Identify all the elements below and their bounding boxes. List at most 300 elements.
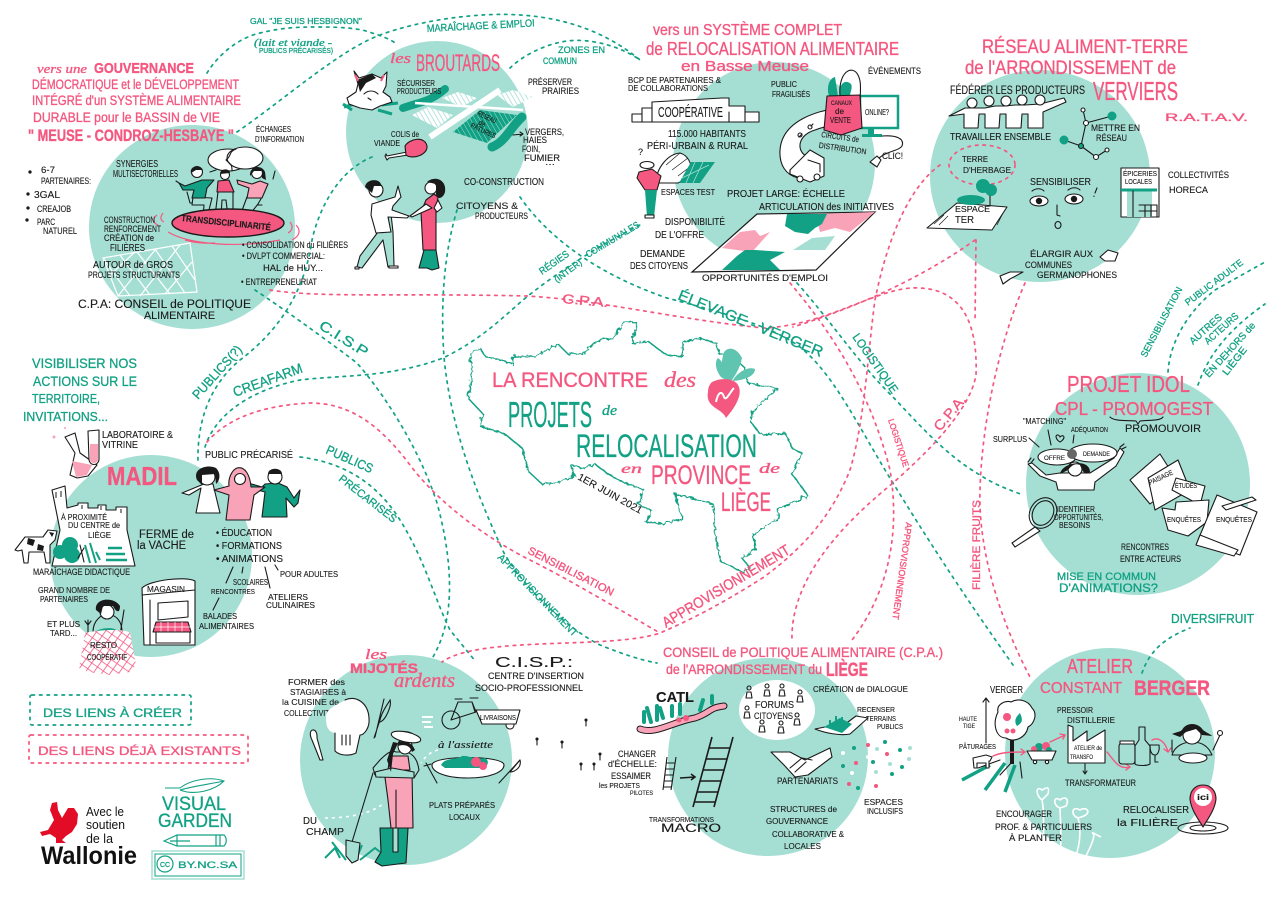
- link label: c.p.a. right: C.P.A.: [930, 391, 969, 434]
- text: construction renforcement: FILIÈRES: [110, 241, 145, 254]
- text: liste de partenaires: 3GAL: [34, 190, 60, 201]
- panel: réseau Aliment-Terre Verviers: [927, 37, 1248, 284]
- icon: cow in pasture: [973, 755, 992, 768]
- text: opportunités d'emploi: OPPORTUNITÉS D'EMPLOI: [702, 273, 828, 284]
- legend: dotted link types: [29, 695, 248, 763]
- text: éducation formations animations: • ÉDUCATION: [216, 526, 272, 539]
- text: espace ter: [955, 205, 990, 226]
- text: former des stagiaires: COLLECTIVITÉS: [284, 708, 339, 718]
- text: animations detail: CULINAIRES: [266, 601, 315, 610]
- text: documents labels: ENQUÊTES: [1216, 515, 1252, 524]
- text: changer d'échelle: d'ÉCHELLE:: [608, 759, 657, 770]
- text: citoyens et producteurs: [456, 201, 528, 221]
- text: du champ: DU: [303, 816, 317, 827]
- text: construction renforcement: [104, 215, 161, 254]
- link label: logistique green: LOGISTIQUE: [850, 331, 901, 396]
- icon: terre d'herbage dotted circle: [949, 145, 1015, 185]
- icon: three people seated on pink disc: [176, 166, 275, 218]
- connections: green dotted links to create: [198, 14, 1265, 673]
- text: autour de gros projets structurants: [88, 260, 180, 280]
- text: recenser terrains publics: [857, 705, 903, 731]
- text: resto coopératif: COOPÉRATIF: [87, 652, 127, 662]
- text: avec le soutien de la wallonie: [41, 805, 137, 870]
- text: magasin: MAGASIN: [147, 584, 185, 594]
- text: identifier opportunités: IDENTIFIER: [1057, 505, 1095, 514]
- text: catl: CATL: [656, 689, 694, 706]
- text: sécuriser producteurs: [397, 78, 441, 96]
- link label: autres acteurs en dehors de liège: EN DEHORS de: [1203, 320, 1258, 380]
- text: espaces inclusifs: ESPACES: [864, 797, 903, 807]
- circle: mijotés background: [300, 655, 512, 865]
- heading: projet idol: [1055, 371, 1213, 419]
- text: resto coopératif: [87, 640, 127, 662]
- icon: handshake: [771, 748, 832, 777]
- text: animations detail: [199, 570, 338, 631]
- icon: pencil: [164, 835, 226, 846]
- text: mettre en réseau: RÉSEAU: [1096, 133, 1127, 143]
- text: atelier de transfo: [1070, 745, 1102, 761]
- text: conseil de politique alimentaire: ALIMENTAIRE: [144, 310, 215, 322]
- text: liste de partenaires: PARC: [37, 217, 55, 227]
- heading: réseau aliment-terre: de l'ARRONDISSEMENT de: [965, 58, 1176, 79]
- text: pressoir distillerie: [1057, 705, 1115, 725]
- link label: autres acteurs en dehors de liège: [1188, 311, 1258, 380]
- text: grand nombre de partenaires: ET PLUS: [47, 620, 80, 629]
- circle: idol background: [1026, 373, 1250, 595]
- icon: licence box: [152, 851, 244, 879]
- text: cc by nc sa: [160, 860, 238, 871]
- text: ici: ici: [1197, 793, 1209, 802]
- link label: sensibilisation public adulte: PUBLIC ADULTE: [1183, 257, 1246, 308]
- icon: resto coopératif lady at table: [79, 600, 136, 675]
- text: 115 000 habitants: [647, 129, 748, 152]
- text: plats préparés locaux: LOCAUX: [449, 812, 480, 822]
- text: demande des citoyens: DES CITOYENS: [630, 260, 688, 272]
- text: visibiliser nos actions: TERRITOIRE,: [32, 391, 100, 406]
- icon: reaching hands: [1000, 250, 1118, 284]
- text: mettre en réseau: [1091, 123, 1140, 143]
- text: mise en commun d'animations: [1057, 571, 1158, 595]
- text: autour de gros projets structurants: PROJETS STRUCTURANTS: [88, 270, 180, 280]
- text: documents labels: ENQUÊTES: [1167, 515, 1201, 524]
- heading: relocalisation: RELOCALISATION: [576, 428, 757, 464]
- heading: en province de liège: de: [759, 461, 780, 477]
- text: encourager à planter: ENCOURAGER: [996, 809, 1052, 819]
- text: relocaliser la filière: [1117, 805, 1189, 829]
- link label: gal je suis hesbignon: GAL "JE SUIS HESBIGNON": [250, 16, 362, 26]
- circle: atelier background: [1005, 648, 1215, 858]
- icon: road and truck: [780, 107, 855, 182]
- text: consolidation filières: • ENTREPRENEURIAT: [241, 277, 317, 287]
- heading: conseil de politique alimentaire: CONSEIL de POLITIQUE ALIMENTAIRE (C.P.A.): [663, 644, 943, 660]
- text: encourager à planter: [995, 809, 1092, 843]
- icon: white sprouts: [1037, 788, 1101, 858]
- icon: network: [1060, 108, 1116, 160]
- icon: flask and test tube: [52, 427, 99, 478]
- text: construction renforcement: CRÉATION de: [104, 233, 154, 243]
- icon: white dotted links on panel: [325, 750, 438, 818]
- link label: autres acteurs en dehors de liège: ACTEURS: [1203, 311, 1241, 347]
- text: avec le soutien de la wallonie: soutien: [86, 818, 125, 832]
- text: pressoir distillerie: DISTILLERIE: [1067, 715, 1115, 725]
- text: réseau de pâtures: [469, 109, 498, 140]
- heading: réseau aliment-terre: RÉSEAU ALIMENT-TERRE: [982, 37, 1188, 58]
- logo: Visual Garden: [152, 779, 244, 879]
- link label: sensibilisation: SENSIBILISATION: [526, 545, 616, 599]
- text: resto coopératif: RESTO: [90, 640, 117, 650]
- text: espaces test: ESPACES TEST: [661, 188, 715, 197]
- text: livraisons: LIVRAISONS: [480, 713, 516, 722]
- text: verger: VERGER: [990, 685, 1023, 696]
- panel: projet IDOL: [993, 371, 1257, 595]
- text: à proximité du centre de liège: LIÈGE: [88, 530, 111, 540]
- text: réseau de pâtures: RÉSEAU: [476, 109, 498, 125]
- text: transformations macro: TRANSFORMATIONS: [649, 815, 714, 824]
- text: coopérative: COOPÉRATIVE: [658, 104, 723, 121]
- link label: élevage verger: ÉLEVAGE - VERGER: [676, 287, 826, 361]
- text: clic: [870, 151, 903, 167]
- heading: conseil de politique alimentaire: LIÈGE: [826, 659, 868, 681]
- text: éducation formations animations: • ANIMATIONS: [216, 554, 283, 565]
- text: espaces inclusifs: [864, 797, 903, 816]
- text: vergers haies foin fumier: ...: [545, 158, 555, 167]
- text: avec le soutien de la wallonie: de la: [86, 832, 113, 846]
- legend: des liens à créer: DES LIENS À CRÉER: [43, 705, 182, 720]
- heading: les Mijotés ardents: MIJOTÉS: [350, 660, 418, 676]
- text: promouvoir: PROMOUVOIR: [1125, 423, 1201, 435]
- text: collectivités horeca: HORECA: [1169, 185, 1208, 195]
- logo: Wallonie: [40, 802, 137, 870]
- text: à l'assiette: à l'assiette: [438, 740, 494, 751]
- panel: conseil de politique alimentaire Liège: [536, 644, 943, 856]
- link label: sensibilisation public adulte: [1139, 257, 1246, 359]
- text: citoyens et producteurs: PRODUCTEURS: [475, 211, 528, 221]
- text: colis de viande: [374, 130, 419, 148]
- icon: monitor online: [860, 96, 903, 162]
- icon: cow head: [343, 71, 398, 114]
- panel: atelier Constant Berger: [959, 611, 1254, 858]
- text: grand nombre de partenaires: TARD...: [50, 629, 77, 638]
- link label: gal je suis hesbignon: (lait et viande -: [254, 38, 332, 49]
- text: offre demande: OFFRE: [1044, 455, 1066, 462]
- text: visibiliser nos actions: [23, 355, 137, 424]
- text: identifier opportunités: BESOINS: [1059, 521, 1090, 530]
- text: collectivités horeca: [1168, 170, 1229, 195]
- text: date 1er juin 2021: 1ER JUIN 2021: [576, 472, 644, 517]
- text: espace ter: ESPACE: [955, 205, 990, 214]
- text: 115 000 habitants: PÉRI-URBAIN & RURAL: [647, 139, 748, 152]
- icon: documents stack: [1130, 454, 1257, 556]
- link label: zones en commun: [543, 45, 605, 67]
- text: animations detail: BALADES: [203, 612, 237, 621]
- text: recenser terrains publics: RECENSER: [857, 705, 896, 714]
- heading: conseil de politique alimentaire: [663, 644, 943, 681]
- text: disponibilité de l'offre: [655, 215, 725, 241]
- link label: zones en commun: COMMUN: [543, 56, 577, 67]
- icon: red rooster: [40, 802, 78, 843]
- text: former des stagiaires: la CUISINE de: [282, 697, 339, 707]
- icon: magnifying glass: [1012, 493, 1062, 547]
- text: animations detail: ATELIERS: [268, 593, 308, 602]
- link label: c.p.a. top: C.P.A.: [562, 291, 609, 310]
- circle: broutards background: [346, 41, 528, 223]
- title: la rencontre des projets de relocalisation: [492, 349, 780, 517]
- heading: projets de: de: [602, 403, 617, 419]
- text: canaux de vente: CANAUX: [831, 100, 853, 107]
- text: événements: ÉVÉNEMENTS: [868, 66, 921, 76]
- text: sensibiliser: SENSIBILISER: [1030, 177, 1091, 188]
- text: plats préparés locaux: PLATS PRÉPARÉS: [429, 800, 495, 810]
- icon: brace: [1110, 417, 1163, 424]
- text: préserver prairies: [528, 77, 579, 96]
- panel: les Broutards: [343, 41, 579, 270]
- text: documents labels: PAISAGE: [1148, 469, 1175, 487]
- icon: cow: [15, 530, 57, 563]
- icon: forums citoyens: [739, 680, 815, 740]
- link label: régies intercommunales: RÉGIES: [536, 247, 572, 277]
- text: canaux de vente: VENTE: [830, 116, 851, 125]
- text: encourager à planter: À PLANTER: [1009, 833, 1063, 843]
- icon: chef hat: [326, 698, 369, 755]
- heading: les Mijotés ardents: [350, 647, 455, 692]
- text: colis de viande: COLIS de: [391, 130, 419, 139]
- link label: régies intercommunales: (INTER): [552, 257, 584, 285]
- icon: plate with food: [424, 756, 520, 783]
- icon: jar bottle glass: [1119, 727, 1159, 766]
- link label: logistique pink: LOGISTIQUE: [886, 418, 911, 468]
- text: avec le soutien de la wallonie: Wallonie: [41, 842, 137, 870]
- text: épiceries locales: LOCALES: [1125, 179, 1152, 186]
- text: à proximité du centre de liège: [61, 512, 120, 540]
- icon: city building with vegetable garden: [52, 486, 135, 566]
- text: public fragilisés: FRAGILISÉS: [772, 90, 810, 99]
- heading: réseau aliment-terre: VERVIERS: [1093, 76, 1178, 106]
- link label: autres acteurs en dehors de liège: LIÈGE: [1219, 344, 1250, 378]
- text: mise en commun d'animations: MISE EN COMMUN: [1057, 571, 1156, 583]
- text: pressoir distillerie: PRESSOIR: [1057, 705, 1093, 715]
- heading: gouvernance démocratique: GOUVERNANCE: [94, 60, 194, 77]
- text: former des stagiaires: [282, 677, 346, 718]
- text: haute tige pâturages: [959, 716, 996, 751]
- text: partenaires et collaborations: [628, 76, 722, 93]
- link label: gal je suis hesbignon: [250, 16, 362, 55]
- text: vergers haies foin fumier: [522, 127, 564, 167]
- text: visibiliser nos actions: ACTIONS SUR LE: [33, 373, 137, 389]
- heading: en province de liège: LIÈGE: [721, 487, 771, 517]
- text: encourager à planter: PROF. & PARTICULIERS: [995, 822, 1092, 832]
- text: relocaliser la filière: la FILIÈRE: [1117, 816, 1178, 829]
- circle: gouvernance background: [89, 125, 295, 329]
- text: épiceries locales: [1123, 169, 1157, 186]
- text: visual garden: VISUAL: [162, 794, 226, 815]
- text: élargir aux communes germanophones: COMMUNES: [1025, 260, 1072, 270]
- heading: la rencontre des: LA RENCONTRE: [492, 369, 648, 392]
- circle: basse meuse background: [673, 62, 875, 264]
- text: circuits de distribution: DISTRIBUTION: [818, 141, 867, 156]
- link label: maraîchage et emploi: MARAÎCHAGE & EMPLOI: [426, 16, 535, 35]
- text: demande des citoyens: [630, 248, 688, 272]
- text: ferme de la vache: [137, 529, 194, 552]
- text: laboratoire et vitrine: VITRINE: [102, 439, 138, 451]
- icon: factory: [1068, 725, 1105, 763]
- text: élargir aux communes germanophones: GERMANOPHONES: [1037, 270, 1117, 280]
- text: matching adéquation surplus: [993, 417, 1108, 447]
- text: identifier opportunités: OPPORTUNITÉS,: [1054, 513, 1103, 522]
- text: circuits de distribution: [818, 130, 869, 156]
- text: synergies multisectorielles: [113, 159, 178, 180]
- heading: atelier constant berger: ATELIER: [1067, 656, 1133, 678]
- text: réseau de pâtures: de: [477, 119, 487, 129]
- text: structures de gouvernance: GOUVERNANCE: [766, 816, 828, 826]
- text: ferme de la vache: la VACHE: [137, 540, 186, 552]
- text: sécuriser producteurs: SÉCURISER: [397, 78, 435, 88]
- heading: en province de liège: PROVINCE: [651, 460, 751, 490]
- icon: farmer with shovel: [325, 729, 422, 866]
- heading: les Mijotés ardents: les: [365, 647, 387, 663]
- text: grand nombre de partenaires: PARTENAIRES: [40, 595, 88, 604]
- icon: greenhouse and test plot: [656, 153, 715, 183]
- icon: worm with plants: [640, 696, 724, 731]
- text: disponibilité de l'offre: DISPONIBILITÉ: [665, 215, 725, 228]
- text: à proximité du centre de liège: À PROXIMITÉ: [61, 512, 107, 522]
- heading: projet idol: CPL - PROMOGEST: [1055, 399, 1213, 419]
- link label: c.i.s.p: C.I.S.P: [316, 317, 372, 360]
- text: élargir aux communes germanophones: [1025, 249, 1117, 280]
- text: grand nombre de partenaires: [38, 586, 110, 638]
- text: du champ: CHAMP: [306, 827, 344, 838]
- heading: système complet de relocalisation: en Basse Meuse: [681, 58, 809, 75]
- text: projet large échelle: ARTICULATION des INITIATIVES: [759, 202, 894, 213]
- text: c.i.s.p. definition: SOCIO-PROFESSIONNEL: [475, 683, 583, 693]
- heading: les Broutards: [390, 50, 500, 77]
- text: consolidation filières: [241, 240, 348, 287]
- text: canaux de vente: de: [835, 107, 845, 116]
- text: éducation formations animations: [213, 526, 283, 610]
- heading: conseil de politique alimentaire: de l'ARRONDISSEMENT du: [666, 661, 822, 677]
- text: cc by nc sa: CC: [160, 862, 170, 869]
- icon: leaf: [165, 779, 224, 792]
- link label: creafarm: CREAFARM: [231, 360, 305, 400]
- text: animations detail: SCOLAIRES: [233, 578, 268, 587]
- text: matching adéquation surplus: SURPLUS: [993, 435, 1027, 444]
- link label: filière fruits: FILIÈRE FRUITS: [970, 500, 983, 590]
- heading: atelier constant berger: CONSTANT: [1040, 680, 1122, 697]
- text: public fragilisés: PUBLIC: [771, 80, 797, 89]
- text: partenaires et collaborations: BCP DE PARTENAIRES &: [628, 76, 722, 85]
- icon: map pin ici: [1178, 785, 1228, 834]
- heading: projets de: PROJETS: [508, 394, 592, 435]
- heading: en province de liège: [621, 460, 780, 517]
- icon: coopérative bricks: [632, 98, 759, 122]
- text: haute tige pâturages: TIGE: [963, 723, 976, 730]
- text: structures de gouvernance: [766, 804, 844, 851]
- text: forums citoyens: [754, 700, 794, 722]
- icon: arrow haute tige: [983, 698, 989, 743]
- heading: projets de: [508, 394, 617, 435]
- text: consolidation filières: HAL de HUY...: [263, 263, 323, 273]
- text: du champ: [303, 816, 344, 838]
- heading: Madil: MADIL: [107, 461, 177, 491]
- text: visibiliser nos actions: VISIBILISER NOS: [32, 355, 137, 371]
- heading: gouvernance démocratique: [28, 60, 241, 145]
- text: maraîchage didactique: MARAÎCHAGE DIDACTIQUE: [33, 567, 130, 577]
- heading: atelier constant berger: [1040, 656, 1210, 700]
- text: changer d'échelle: ESSAIMER: [611, 771, 651, 781]
- text: visibiliser nos actions: INVITATIONS...: [23, 409, 108, 424]
- link label: publics précarisés: PUBLICS: [324, 442, 376, 476]
- text: synergies multisectorielles: SYNERGIES: [116, 159, 158, 170]
- text: liste de partenaires: [25, 165, 91, 236]
- icon: couple shaking hands: [355, 179, 445, 270]
- icon: farmer standing: ?: [638, 147, 643, 157]
- text: changer d'échelle: CHANGER: [618, 749, 656, 759]
- text: terre d'herbage: TERRE: [962, 155, 988, 164]
- text: demande des citoyens: DEMANDE: [640, 248, 685, 260]
- text: c.i.s.p. definition: CENTRE D'INSERTION: [488, 671, 584, 681]
- text: à proximité du centre de liège: DU CENTRE de: [68, 521, 120, 530]
- icon: arrow to vergers: [513, 132, 523, 136]
- icon: net white grid: [103, 243, 197, 296]
- text: public précarisé: PUBLIC PRÉCARISÉ: [205, 448, 293, 461]
- text: partenariats: PARTENARIATS: [777, 776, 838, 787]
- heading: la rencontre des: des: [664, 367, 696, 392]
- text: animations detail: RENCONTRES: [211, 587, 255, 596]
- text: changer d'échelle: [599, 749, 657, 797]
- text: matching adéquation surplus: ADÉQUATION: [1071, 425, 1108, 434]
- icon: whisk and spoon: [310, 699, 390, 760]
- icon: radish logo: [708, 349, 755, 418]
- text: fédérer les producteurs: FÉDÉRER LES PRODUCTEURS: [950, 84, 1085, 97]
- icon: magasin shop: [142, 579, 195, 645]
- text: circuits de distribution: CIRCUITS de: [821, 130, 860, 144]
- link label: régies intercommunales: COMMUNALES: [584, 220, 642, 261]
- text: rencontres entre acteurs: ENTRE ACTEURS: [1120, 554, 1181, 564]
- text: projet large échelle: PROJET LARGE: ÉCHELLE: [727, 187, 845, 200]
- text: changer d'échelle: PILOTES: [630, 791, 653, 797]
- text: échanges d'information: D'INFORMATION: [255, 135, 304, 144]
- text: documents labels: ÉTUDES: [1175, 481, 1197, 490]
- text: documents labels: [1148, 469, 1252, 524]
- icon: meat: [385, 139, 427, 160]
- icon: arrow to transformateur: [1083, 764, 1087, 774]
- text: éducation formations animations: • FORMATIONS: [216, 541, 282, 552]
- link label: publics précarisés: [324, 442, 399, 525]
- heading: gouvernance démocratique: vers une: [37, 61, 87, 76]
- link label: approvisionnement pink: APPROVISIONNEMENT: [659, 542, 793, 631]
- text: recenser terrains publics: TERRAINS: [866, 714, 896, 723]
- text: laboratoire et vitrine: LABORATOIRE &: [102, 429, 173, 441]
- text: structures de gouvernance: LOCALES: [784, 841, 821, 851]
- icon: three people arms linked: [182, 466, 300, 520]
- text: rencontres entre acteurs: [1120, 542, 1181, 564]
- text: online: ONLINE?: [865, 108, 889, 117]
- icon: five people together: [949, 95, 1066, 128]
- heading: gouvernance démocratique: DURABLE pour le BASSIN de VIE: [33, 109, 220, 125]
- heading: en province de liège: en: [621, 462, 642, 477]
- text: collectivités horeca: COLLECTIVITÉS: [1168, 170, 1229, 180]
- text: forums citoyens: CITOYENS: [754, 711, 793, 722]
- text: vergers haies foin fumier: VERGERS,: [525, 127, 564, 137]
- text: sécuriser producteurs: PRODUCTEURS: [397, 86, 441, 96]
- text: autour de gros projets structurants: AUTOUR de GROS: [93, 260, 173, 271]
- text: diversifruit: DIVERSIFRUIT: [1171, 611, 1254, 626]
- circle: madil background: [50, 455, 252, 657]
- text: liste de partenaires: PARTENAIRES:: [41, 176, 91, 186]
- link label: publics (?): PUBLICS(?): [189, 342, 245, 402]
- text: préserver prairies: PRÉSERVER: [528, 77, 572, 87]
- text: mise en commun d'animations: D'ANIMATIONS?: [1059, 581, 1158, 595]
- text: consolidation filières: • DVLPT COMMERCIAL:: [242, 251, 325, 261]
